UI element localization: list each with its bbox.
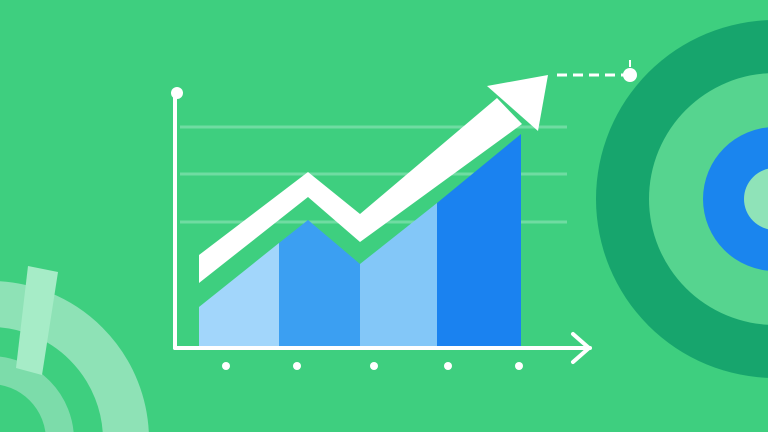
axis top dot	[171, 87, 183, 99]
dashed target line with dot	[557, 60, 637, 82]
grid lines	[180, 127, 567, 222]
axes	[175, 95, 590, 362]
decoration: bottom-left arcs	[0, 266, 126, 432]
trend arrow	[199, 75, 548, 283]
decoration: target circles right	[596, 20, 768, 378]
bar chart area	[199, 134, 521, 347]
x-axis tick dots	[222, 362, 523, 370]
